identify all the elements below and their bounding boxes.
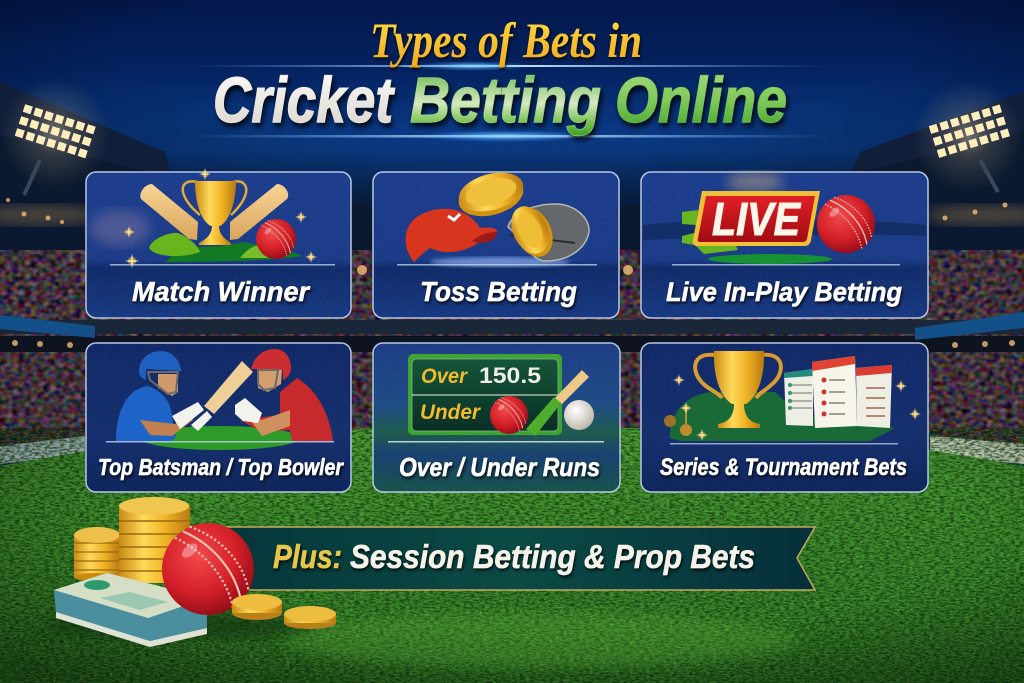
icon: large cricket ball	[162, 523, 254, 615]
icon: grass	[682, 210, 832, 264]
title	[190, 12, 830, 142]
icon: bat	[204, 361, 253, 414]
text: 150.5: 150.5	[479, 363, 541, 388]
LIVE text: LIVE	[712, 193, 801, 245]
label: Toss Betting: Toss Betting	[420, 276, 577, 307]
panel: Over / Under Runs	[373, 343, 620, 492]
icon: grey cap	[508, 204, 589, 261]
icon: bat	[526, 370, 589, 436]
panel: Match Winner	[86, 168, 351, 318]
icon: cash bundle	[54, 573, 207, 647]
icon: left sheet	[784, 369, 813, 426]
title word: Cricket: Cricket	[213, 64, 395, 136]
icon: cricket ball	[256, 219, 296, 259]
title word: Betting: Betting	[410, 64, 601, 136]
label: Top Batsman / Top Bowler: Top Batsman / Top Bowler	[98, 454, 344, 480]
icon: cricket ball	[817, 195, 875, 253]
icon group: coins, ball and cash	[45, 497, 336, 647]
grass field	[0, 428, 1024, 683]
icon: small coin right	[284, 606, 336, 629]
odds board	[408, 354, 562, 435]
icon: gold coin top	[454, 166, 528, 223]
icon: red ball	[490, 396, 528, 434]
title glow lines	[190, 61, 830, 142]
icon: small coin left	[232, 594, 282, 620]
icon: centre sheet	[812, 356, 857, 428]
icon: trophy	[695, 351, 781, 428]
title line 1: Types of Bets in	[370, 12, 642, 68]
label: Match Winner: Match Winner	[132, 276, 311, 307]
label: Over / Under Runs: Over / Under Runs	[399, 452, 600, 482]
sparkles	[123, 168, 317, 268]
text: Over: Over	[421, 365, 469, 388]
banner text: Plus: Plus:	[273, 538, 342, 575]
floodlight: left	[0, 78, 110, 195]
icon: batsman	[116, 351, 212, 441]
icon: red cap	[406, 209, 497, 262]
icon: right bat	[230, 184, 288, 240]
text: Under: Under	[420, 401, 482, 424]
banner text: Session Betting and Prop Bets: Session Betting & Prop Bets	[350, 538, 755, 575]
icon: LIVE badge	[693, 191, 820, 246]
banner: Plus	[225, 527, 815, 590]
icon: bowler	[235, 349, 333, 441]
icon: white ball	[564, 400, 594, 430]
icon: left bat	[140, 184, 198, 240]
label: Live In-Play Betting: Live In-Play Betting	[666, 277, 902, 307]
panel: Live In-Play Betting	[641, 172, 928, 318]
icon: gold coin side	[504, 200, 560, 263]
icon: right sheet	[856, 365, 892, 428]
panel: Series & Tournament Bets	[641, 343, 928, 492]
icon: green hill	[670, 392, 895, 441]
floodlight: right	[913, 81, 1023, 192]
label: Series & Tournament Bets: Series & Tournament Bets	[660, 454, 907, 481]
panel: Top Batsman / Top Bowler	[86, 343, 351, 492]
icon: small awards and sparkles	[664, 374, 921, 441]
icon: grass patch	[149, 233, 302, 262]
icon: trophy	[183, 181, 246, 245]
title word: Online: Online	[615, 64, 787, 136]
panel: Toss Betting	[373, 166, 619, 318]
icon: short coin stack	[74, 527, 120, 581]
icon: tall coin stack	[119, 497, 190, 583]
